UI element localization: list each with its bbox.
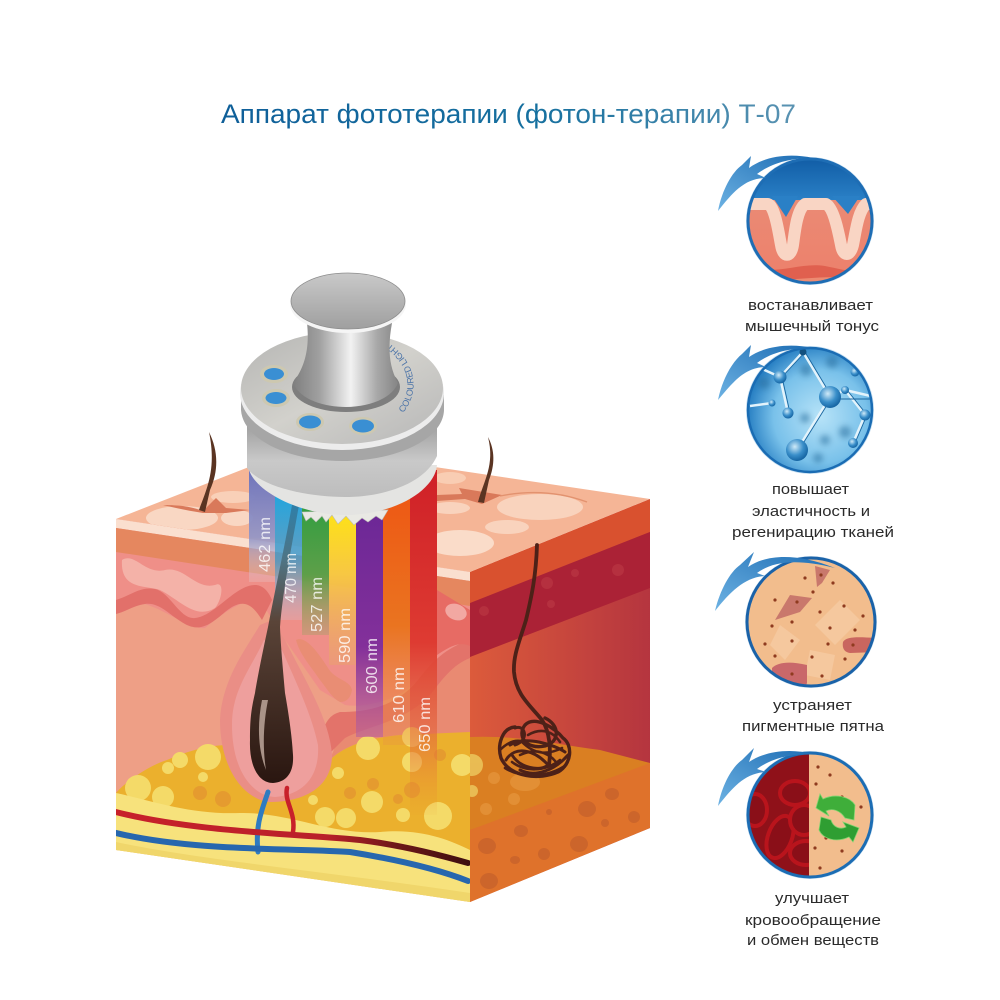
device white tray <box>248 465 437 515</box>
panel: elasticity <box>718 345 894 541</box>
icon: skin pigment circle <box>745 555 880 691</box>
caption: pigment spots <box>742 697 885 735</box>
beam 590 nm <box>329 500 356 665</box>
icon: muscle tissue circle <box>746 157 874 285</box>
caption: elasticity <box>732 481 894 541</box>
device lower body <box>247 425 437 497</box>
icon: green recycle arrows <box>816 794 859 842</box>
lower dermis right <box>332 658 470 758</box>
label 470 nm: 470 nm <box>283 553 300 603</box>
skin right face layers <box>461 499 650 905</box>
caption: elasticity: регенирацию тканей <box>732 524 894 541</box>
caption: pigment spots: устраняет <box>773 697 852 714</box>
caption: muscle tone: мышечный тонус <box>745 318 880 335</box>
caption: elasticity: повышает <box>772 481 849 498</box>
hair follicle <box>220 620 332 802</box>
device disc top <box>241 332 443 444</box>
caption: circulation: улучшает <box>775 890 849 907</box>
panel: circulation <box>718 748 881 949</box>
beam 610 nm <box>383 480 410 745</box>
device ring text: COLOURED LIGHT <box>390 345 414 412</box>
caption: elasticity: эластичность и <box>752 503 870 520</box>
hair on left of surface <box>199 432 216 512</box>
fat globules <box>125 727 473 830</box>
dermal wave band <box>116 585 272 627</box>
panel: pigment spots <box>715 552 885 735</box>
device teeth <box>302 510 388 525</box>
caption: pigment spots: пигментные пятна <box>742 718 885 735</box>
label 462 nm: 462 nm <box>257 517 274 572</box>
beam 650 nm <box>410 470 437 815</box>
arrow: swoosh <box>718 748 813 806</box>
skin front face layers <box>112 510 473 910</box>
upper dermis light wave <box>122 558 221 612</box>
label 650 nm: 650 nm <box>417 697 434 752</box>
subcutaneous cream layer <box>116 793 470 905</box>
fat layer <box>116 732 470 850</box>
hair shaft and bulb <box>250 505 299 783</box>
device neck <box>292 323 400 412</box>
icon: molecule circle <box>745 345 875 475</box>
beam 462 nm <box>249 470 275 582</box>
upper dermis pink <box>116 528 470 706</box>
caption: circulation <box>745 890 881 949</box>
icon: blood and skin circle <box>743 750 879 880</box>
right dermal fold <box>326 644 470 752</box>
label 590 nm: 590 nm <box>337 608 354 663</box>
sweat gland <box>500 545 570 776</box>
title: Аппарат фототерапии (фотон-терапии) Т-07 <box>221 99 796 129</box>
arrow: swoosh <box>715 552 835 611</box>
label 610 nm: 610 nm <box>391 667 408 723</box>
panel: muscle tone <box>718 155 880 335</box>
beam 600 nm <box>356 500 383 737</box>
label 527 nm: 527 nm <box>309 577 326 632</box>
label 600 nm: 600 nm <box>364 638 381 694</box>
hair on right of surface <box>478 437 493 503</box>
arrow: swoosh <box>718 345 813 400</box>
device: phototherapy head <box>240 272 444 526</box>
device blue indicators <box>260 365 377 435</box>
blood vessels <box>112 788 468 881</box>
wavelength labels <box>257 517 434 752</box>
caption: muscle tone: востанавливает <box>748 297 873 314</box>
skin top surface <box>116 447 650 572</box>
caption: circulation: кровообращение <box>745 912 881 929</box>
device cap <box>290 273 406 333</box>
skin cube illustration <box>112 432 650 910</box>
arrow: swoosh <box>718 156 813 211</box>
beam 527 nm <box>302 500 329 635</box>
device disc rim <box>241 395 444 461</box>
beam 470 nm <box>275 490 302 620</box>
light beams <box>249 470 437 815</box>
caption: circulation: и обмен веществ <box>747 932 879 949</box>
caption: muscle tone <box>745 297 880 335</box>
